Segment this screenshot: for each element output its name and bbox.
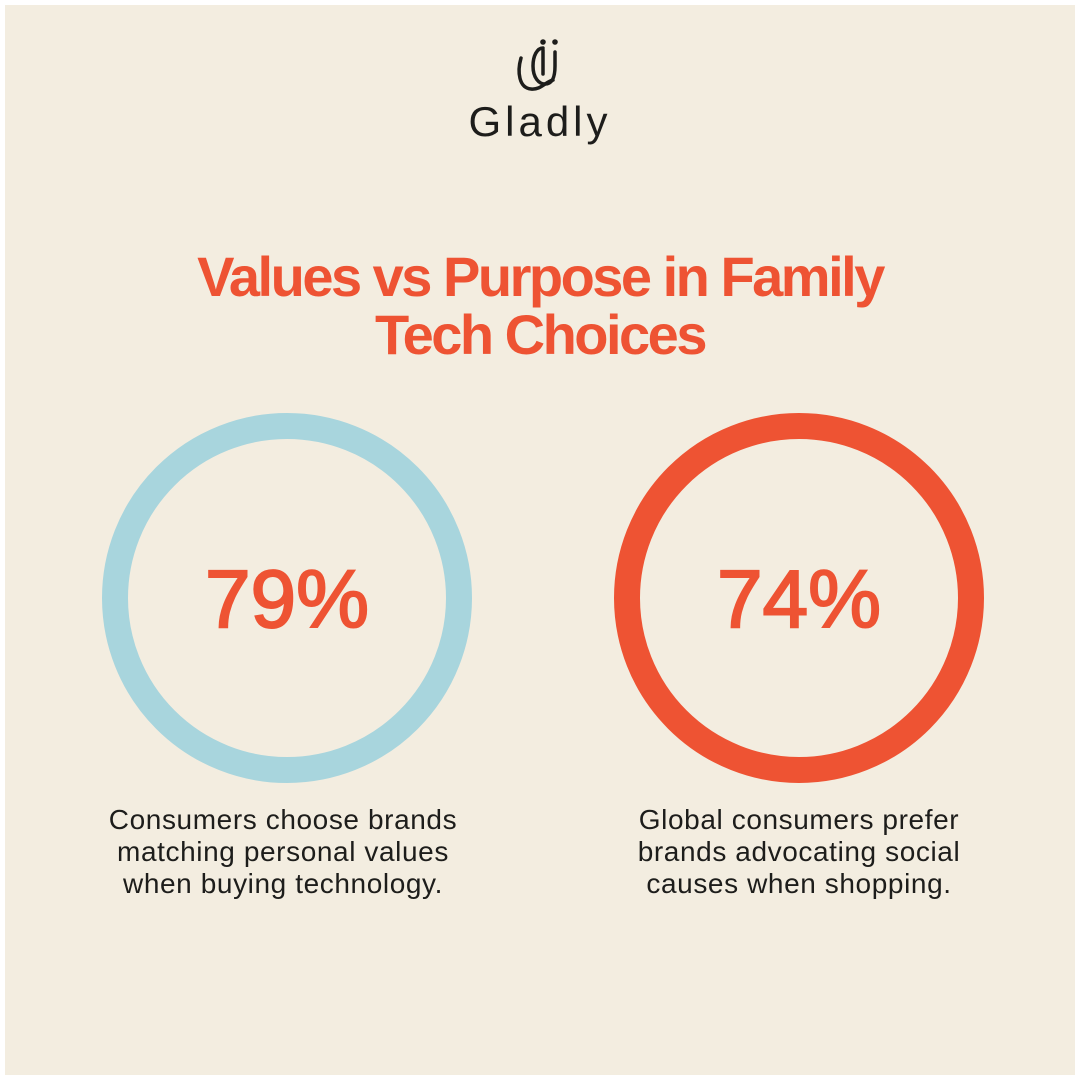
caption: [638, 804, 960, 899]
title: Values vs Purpose in Family: [197, 245, 883, 308]
stat 79%: 79%: [205, 554, 369, 645]
logo: [468, 39, 612, 145]
title: Tech Choices: [375, 303, 705, 366]
caption: [109, 804, 457, 899]
panel: 74%: [614, 413, 984, 899]
caption: when buying technology.: [123, 868, 443, 899]
caption: Global consumers prefer: [639, 804, 959, 835]
caption: causes when shopping.: [646, 868, 952, 899]
ring: red: [614, 413, 984, 783]
ring: blue: [102, 413, 472, 783]
wordmark: Gladly: [468, 98, 612, 145]
caption: brands advocating social: [638, 836, 960, 867]
stat 74%: 74%: [717, 554, 881, 645]
caption: matching personal values: [117, 836, 449, 867]
caption: Consumers choose brands: [109, 804, 457, 835]
icon: gladly mark: [517, 39, 558, 91]
title: [197, 245, 886, 366]
panel: 79%: [102, 413, 472, 899]
